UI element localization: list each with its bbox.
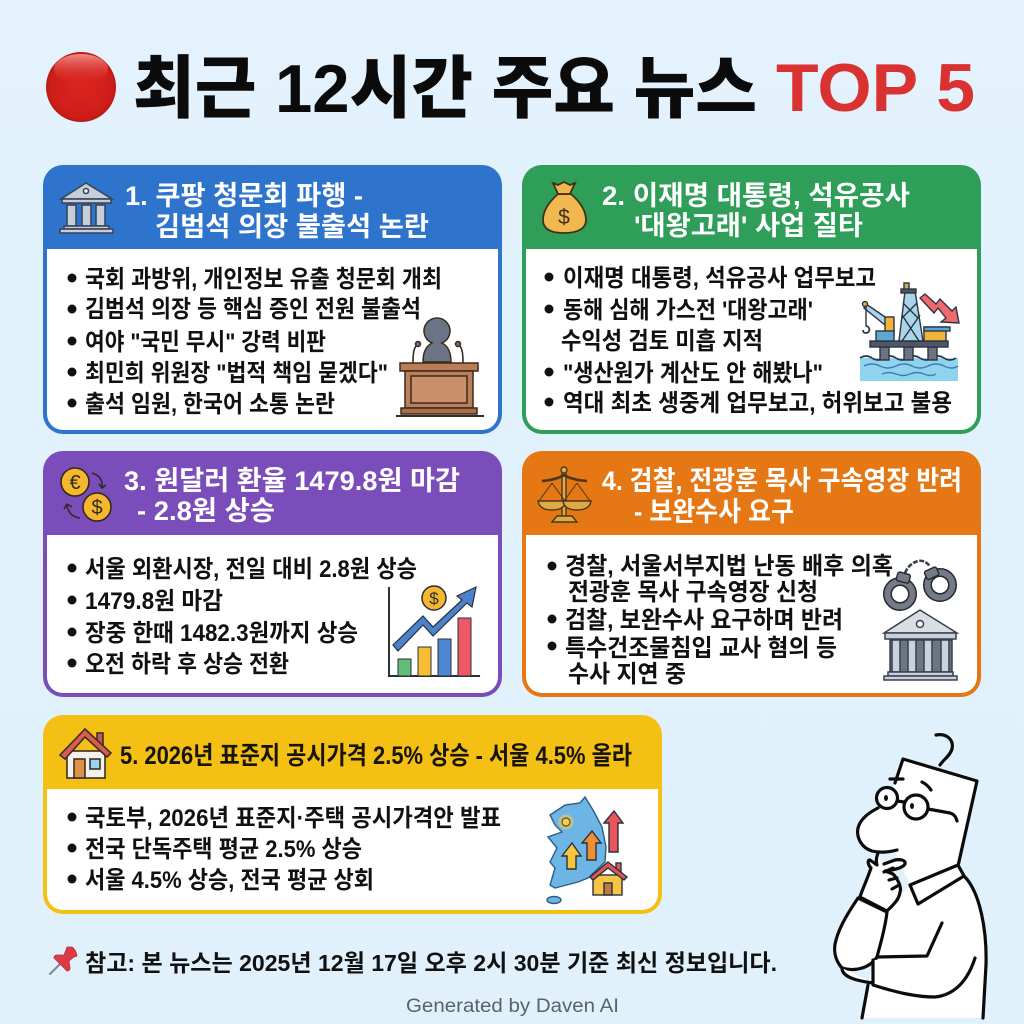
panel 1 heading <box>125 181 429 242</box>
panel 1 heading: 김범석 의장 불출석 논란 <box>155 212 429 242</box>
panel 5 bullets: 전국 단독주택 평균 2.5% 상승 <box>85 836 362 863</box>
icon: pushpin <box>50 947 77 974</box>
icon: rising bar chart <box>389 586 480 676</box>
panel 3 heading: 3. 원달러 환율 1479.8원 마감 <box>124 466 460 496</box>
panel 3 background <box>43 451 502 697</box>
panel 4 background <box>522 451 981 697</box>
panel 1 bullets: 최민희 위원장 "법적 책임 묻겠다" <box>85 360 388 387</box>
panel 2 background <box>522 165 981 434</box>
panel 4 heading: - 보완수사 요구 <box>634 497 794 527</box>
panel 2 bullets: 동해 심해 가스전 '대왕고래' <box>563 297 813 324</box>
icon: courthouse <box>884 610 957 680</box>
panel 4 bullets <box>548 553 893 688</box>
panel 3 heading <box>124 466 460 526</box>
note text: 참고: 본 뉴스는 2025년 12월 17일 오후 2시 30분 기준 최신 정보입니다. <box>85 950 777 976</box>
panel 3 bullets: 오전 하락 후 상승 전환 <box>85 651 289 678</box>
collar <box>910 865 964 904</box>
icon: currency exchange: € <box>69 472 81 494</box>
panel 1 bullets: 출석 임원, 한국어 소통 논란 <box>85 391 335 418</box>
panel 3 bullets: 1479.8원 마감 <box>85 588 223 615</box>
eyebrows <box>890 779 931 790</box>
panel 4 bullets: 특수건조물침입 교사 혐의 등 <box>565 635 837 662</box>
title highlight TOP 5: TOP 5 <box>776 50 975 126</box>
icon: bank <box>60 183 113 233</box>
panel 2 bullets: 수익성 검토 미흡 지적 <box>561 328 763 355</box>
icon: money bag <box>543 182 586 233</box>
panel 3: 환율 <box>43 451 502 697</box>
panel 3 bullets <box>68 556 417 678</box>
man body <box>862 877 986 1018</box>
icon: podium with speaker <box>396 318 484 416</box>
panel 4 heading <box>602 466 962 527</box>
panel 3 heading: - 2.8원 상승 <box>137 496 275 526</box>
panel 1: 쿠팡 청문회 <box>43 165 502 434</box>
panel 2: 대왕고래 <box>522 165 981 434</box>
panel 5 background <box>43 715 662 914</box>
man head <box>857 759 977 885</box>
panel 5 heading: 5. 2026년 표준지 공시가격 2.5% 상승 - 서울 4.5% 올라 <box>120 742 632 770</box>
illustration: thinking man <box>835 735 986 1018</box>
panel 1 background <box>43 165 502 434</box>
panel 1 heading: 1. 쿠팡 청문회 파행 - <box>125 181 363 211</box>
icon: scales of justice <box>538 467 591 522</box>
panel 2 heading: 2. 이재명 대통령, 석유공사 <box>602 181 910 211</box>
panel 5 bullets <box>68 805 501 894</box>
icon: offshore oil rig with falling arrow <box>860 283 959 381</box>
panel 1 bullets: 국회 과방위, 개인정보 유출 청문회 개최 <box>85 266 442 293</box>
panel 3 bullets: 장중 한때 1482.3원까지 상승 <box>85 620 358 647</box>
credit: Generated by Daven AI <box>406 996 619 1017</box>
panel 4 heading: 4. 검찰, 전광훈 목사 구속영장 반려 <box>602 466 962 496</box>
panel 4 bullets: 전광훈 목사 구속영장 신청 <box>568 579 818 606</box>
panel 2 heading: '대왕고래' 사업 질타 <box>634 211 863 241</box>
hand on chin <box>860 853 905 911</box>
panel 1 bullets <box>68 266 442 418</box>
sleeve <box>835 898 887 970</box>
panel 5 bullets: 국토부, 2026년 표준지·주택 공시가격안 발표 <box>85 805 501 832</box>
man head outline <box>895 759 977 866</box>
panel 4 bullets: 수사 지연 중 <box>568 661 686 688</box>
icon: red circle <box>46 52 116 122</box>
eye pupils <box>884 795 914 809</box>
icon: rising bar chart: $ <box>429 589 439 608</box>
panel 2 bullets: 역대 최초 생중계 업무보고, 허위보고 불용 <box>563 390 952 417</box>
panel 2 bullets: "생산원가 계산도 안 해봤나" <box>563 360 823 387</box>
panel 3 bullets: 서울 외환시장, 전일 대비 2.8원 상승 <box>85 556 417 583</box>
icon: currency exchange <box>61 468 111 521</box>
panel 1 bullets: 김범석 의장 등 핵심 증인 전원 불출석 <box>85 296 421 323</box>
hair curl <box>936 735 952 765</box>
panel 2 bullets: 이재명 대통령, 석유공사 업무보고 <box>563 265 876 292</box>
icon: house <box>60 729 111 778</box>
panel 2 bullets <box>544 265 952 417</box>
icon: Korea map with rising arrows <box>547 797 627 904</box>
forearm <box>842 958 975 997</box>
nose and mouth <box>858 808 897 852</box>
panel 4: 전광훈 구속영장 <box>522 451 981 697</box>
panel 5 bullets: 서울 4.5% 상승, 전국 평균 상회 <box>85 867 374 894</box>
panel 1 bullets: 여야 "국민 무시" 강력 비판 <box>85 329 326 356</box>
panel 2 heading <box>602 181 910 241</box>
folded arm <box>877 923 942 957</box>
icon: currency exchange: $ <box>91 497 103 519</box>
glasses <box>876 788 957 821</box>
panel 4 bullets: 경찰, 서울서부지법 난동 배후 의혹 <box>565 553 893 580</box>
shirt right outline <box>965 877 986 1018</box>
title text: 최근 12시간 주요 뉴스 <box>133 51 757 127</box>
body left <box>862 985 868 1018</box>
panel 4 bullets: 검찰, 보완수사 요구하며 반려 <box>565 607 843 634</box>
icon: handcuffs <box>888 561 952 606</box>
panel 5: 표준지 공시가격 <box>43 715 662 914</box>
icon: money bag: $ <box>558 206 570 229</box>
title <box>46 50 975 127</box>
